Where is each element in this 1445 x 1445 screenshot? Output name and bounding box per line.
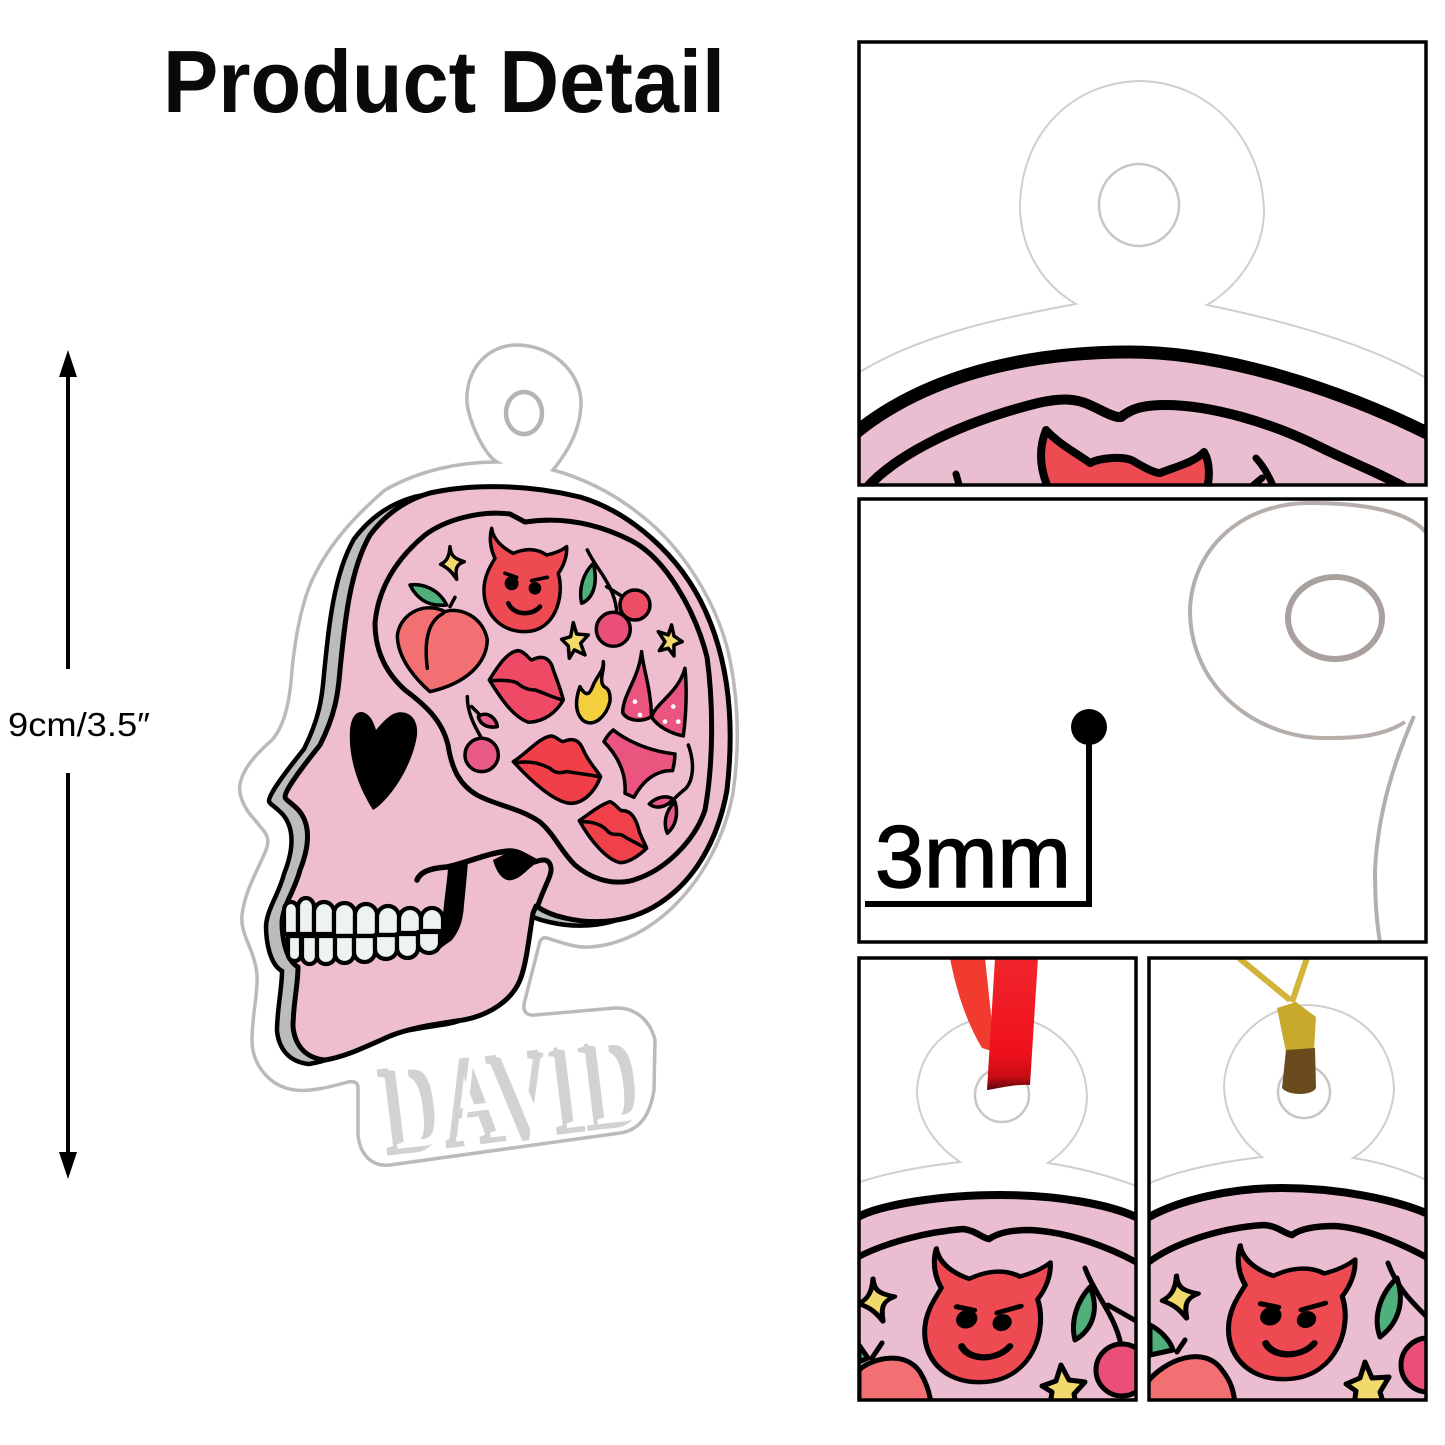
- loop hole ring: [1288, 577, 1382, 659]
- zoomed loop hole: [1278, 1066, 1330, 1118]
- loop hole: [506, 392, 542, 434]
- icon: star one: [562, 623, 588, 658]
- zoomed pink skull area: [1150, 1184, 1424, 1398]
- zoomed sparkle: [1162, 1274, 1198, 1321]
- icon: small cherry: [465, 697, 498, 772]
- acrylic outline with hanging loop: [240, 345, 737, 1165]
- icon: lower lips: [579, 802, 647, 863]
- dimension label: 9cm/3.5″: [8, 706, 150, 743]
- red ribbon: [950, 958, 1038, 1090]
- 3mm label: 3mm: [875, 807, 1071, 906]
- panel: gold cord option: [1147, 956, 1428, 1402]
- icon: bikini bottom: [604, 730, 675, 797]
- skull artwork: [266, 487, 730, 1064]
- panel: 3mm edge distance: [859, 499, 1428, 942]
- zoomed acrylic edge: [860, 81, 1426, 378]
- zoomed peach top: [1145, 1325, 1235, 1405]
- icon: flame: [577, 662, 610, 723]
- icon: middle lips: [513, 736, 601, 803]
- zoomed brain outline: [858, 1229, 1136, 1262]
- panel: red ribbon option: [857, 956, 1138, 1402]
- icon: bikini top: [623, 652, 686, 736]
- zoomed acrylic edge: [860, 1015, 1136, 1186]
- zoomed peach top: [859, 1343, 931, 1405]
- icon: devil face: [484, 528, 567, 632]
- arrow: upper segment: [59, 350, 77, 669]
- personalised name cut-out: [372, 1004, 660, 1182]
- zoomed brain outline: [1149, 1225, 1426, 1262]
- zoomed acrylic edge: [1150, 1005, 1426, 1183]
- icon: star two: [658, 625, 682, 656]
- personalised name cut-out: DAVID: [382, 1004, 660, 1177]
- skull back layer: [266, 491, 714, 1064]
- zoomed stem tips: [956, 458, 1274, 488]
- jaw and mouth: [417, 850, 551, 953]
- panel: hanging loop close-up: [845, 42, 1440, 500]
- zoomed pink skull area: [860, 1191, 1134, 1398]
- icon: upper lips: [489, 651, 563, 722]
- height dimension arrow with label: [8, 350, 150, 1179]
- zoomed brain outline: [865, 399, 1412, 492]
- zoomed devil face: [925, 1238, 1050, 1387]
- title: Product Detail: [163, 32, 725, 131]
- zoomed loop hole: [975, 1068, 1029, 1122]
- zoomed devil face: [1228, 1235, 1355, 1384]
- zoomed leaf and cherry: [1374, 1260, 1424, 1394]
- personalised name cut-out: DAVID: [373, 1009, 650, 1182]
- zoomed star: [1042, 1365, 1085, 1405]
- icon: peach: [397, 585, 487, 692]
- gold cord: [1239, 958, 1316, 1094]
- arrow: lower segment: [59, 773, 77, 1179]
- brain outline: [375, 513, 712, 882]
- teeth: [284, 898, 443, 964]
- brain icons: [397, 528, 692, 863]
- heart eye socket: [350, 712, 417, 810]
- measurement marker: [865, 709, 1107, 904]
- zoomed pink skull area: [860, 346, 1424, 484]
- zoomed devil horns: [1041, 430, 1209, 490]
- zoomed leaf and cherry: [1070, 1266, 1134, 1398]
- product: skull acrylic ornament: [240, 345, 737, 1182]
- zoomed loop hole: [1099, 164, 1179, 246]
- acrylic edge ring: [1190, 503, 1428, 942]
- icon: rose bud stem: [649, 745, 692, 833]
- zoomed sparkle: [859, 1277, 895, 1324]
- skull face: [282, 487, 730, 1060]
- icon: sparkle: [441, 547, 464, 579]
- zoomed star: [1346, 1362, 1389, 1405]
- icon: cherries with leaf: [581, 550, 650, 646]
